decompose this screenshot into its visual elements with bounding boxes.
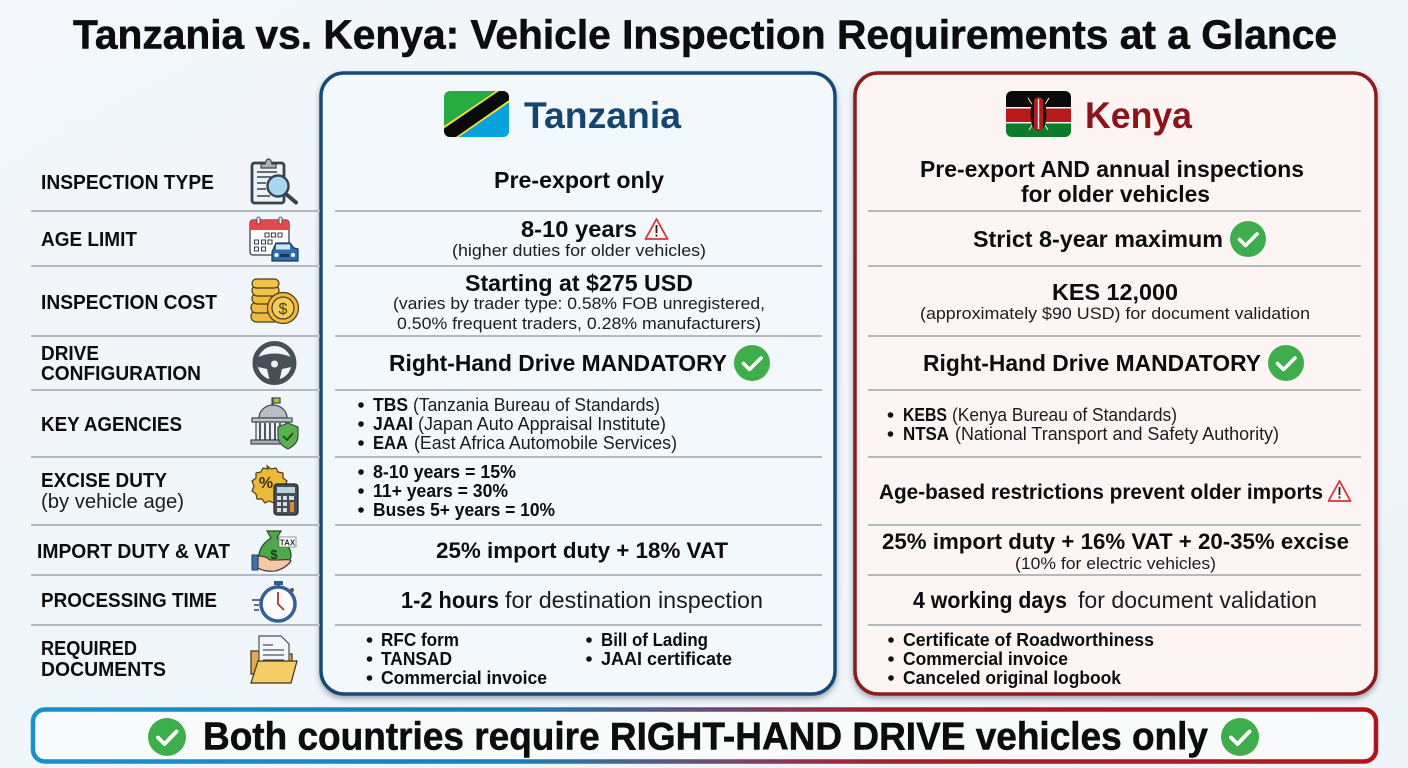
icon: check bbox=[734, 345, 770, 381]
Kenya key agencies: KEBS bbox=[903, 405, 947, 425]
icon: check bbox=[1268, 345, 1304, 381]
label: drive configuration: DRIVE bbox=[41, 343, 99, 365]
Kenya excise duty: Age-based restrictions prevent older imports bbox=[879, 481, 1323, 504]
Tanzania key agencies bbox=[358, 395, 677, 453]
icon: money bag with tax tag: $ bbox=[270, 547, 278, 562]
Kenya import duty bbox=[882, 529, 1349, 573]
Tanzania required documents: Commercial invoice bbox=[381, 668, 547, 688]
Kenya inspection cost: (approximately $90 USD) for document validation bbox=[920, 304, 1310, 323]
label: drive configuration bbox=[41, 343, 201, 385]
Tanzania import duty: 25% import duty + 18% VAT bbox=[436, 538, 729, 563]
icon: warning bbox=[646, 219, 668, 239]
Kenya inspection type: for older vehicles bbox=[1021, 181, 1210, 207]
icon: check right bbox=[1221, 718, 1259, 756]
label: required documents: REQUIRED bbox=[41, 638, 137, 660]
Tanzania inspection cost: Starting at $275 USD bbox=[465, 270, 693, 296]
Tanzania required documents: TANSAD bbox=[381, 649, 452, 669]
heading: Kenya: Kenya bbox=[1085, 95, 1192, 136]
Kenya required documents bbox=[888, 630, 1154, 688]
Kenya key agencies: (National Transport and Safety Authority) bbox=[955, 424, 1279, 444]
Kenya key agencies bbox=[888, 405, 1279, 444]
icon: money bag with tax tag: TAX bbox=[280, 538, 296, 548]
icon: folder with document bbox=[251, 636, 297, 683]
Tanzania drive configuration: Right-Hand Drive MANDATORY bbox=[389, 350, 727, 376]
icon: calendar and car bbox=[250, 217, 298, 261]
Kenya drive configuration bbox=[923, 345, 1304, 381]
label: inspection type: INSPECTION TYPE bbox=[41, 172, 214, 194]
panel: Kenya bbox=[855, 73, 1376, 694]
Kenya required documents: Commercial invoice bbox=[903, 649, 1068, 669]
Tanzania excise duty: Buses 5+ years = 10% bbox=[373, 500, 555, 520]
label: required documents: DOCUMENTS bbox=[41, 659, 166, 681]
icon: coins: $ bbox=[279, 301, 288, 318]
Kenya inspection type bbox=[920, 156, 1304, 207]
Kenya key agencies: NTSA bbox=[903, 424, 949, 444]
Tanzania key agencies: TBS bbox=[373, 395, 408, 415]
Tanzania key agencies: (Tanzania Bureau of Standards) bbox=[413, 395, 660, 415]
Kenya inspection cost: KES 12,000 bbox=[1052, 279, 1178, 305]
Kenya processing time: 4 working days bbox=[913, 587, 1067, 613]
icon: Kenya flag bbox=[1006, 91, 1071, 138]
Tanzania key agencies: (East Africa Automobile Services) bbox=[414, 433, 677, 453]
Kenya import duty: (10% for electric vehicles) bbox=[1015, 554, 1216, 573]
Tanzania required documents bbox=[367, 630, 732, 688]
icon: government building and shield bbox=[251, 398, 298, 449]
Kenya processing time bbox=[913, 587, 1317, 613]
row labels column bbox=[31, 159, 320, 683]
Tanzania inspection type: Pre-export only bbox=[494, 167, 664, 193]
Kenya age limit bbox=[973, 221, 1266, 257]
Tanzania inspection cost: 0.50% frequent traders, 0.28% manufacturers) bbox=[397, 314, 761, 333]
icon: money bag with tax tag bbox=[252, 531, 296, 571]
label: excise duty bbox=[41, 470, 184, 513]
Tanzania key agencies: JAAI bbox=[373, 414, 413, 434]
banner text: Both countries require RIGHT-HAND DRIVE vehicles only bbox=[203, 716, 1208, 758]
Tanzania age limit: (higher duties for older vehicles) bbox=[452, 241, 706, 260]
Tanzania excise duty: 11+ years = 30% bbox=[373, 481, 508, 501]
heading: Tanzania: Tanzania bbox=[524, 95, 681, 136]
Kenya key agencies: (Kenya Bureau of Standards) bbox=[952, 405, 1177, 425]
label: excise duty: EXCISE DUTY bbox=[41, 470, 168, 492]
label: age limit: AGE LIMIT bbox=[41, 229, 137, 251]
label: inspection cost: INSPECTION COST bbox=[41, 292, 217, 314]
Tanzania excise duty bbox=[358, 462, 555, 520]
Kenya age limit: Strict 8-year maximum bbox=[973, 226, 1223, 252]
Tanzania required documents: JAAI certificate bbox=[601, 649, 732, 669]
label: import duty and VAT: IMPORT DUTY & VAT bbox=[37, 541, 230, 563]
Tanzania processing time: for destination inspection bbox=[505, 587, 763, 613]
Tanzania required documents: Bill of Lading bbox=[601, 630, 708, 650]
icon: clipboard and magnifier bbox=[252, 159, 296, 203]
icon: percent badge and calculator: % bbox=[259, 475, 273, 492]
Tanzania drive configuration bbox=[389, 345, 770, 381]
Kenya import duty: 25% import duty + 16% VAT + 20-35% excise bbox=[882, 529, 1349, 554]
Kenya drive configuration: Right-Hand Drive MANDATORY bbox=[923, 350, 1261, 376]
label: key agencies: KEY AGENCIES bbox=[41, 414, 182, 436]
Tanzania key agencies: EAA bbox=[373, 433, 408, 453]
icon: check bbox=[1230, 221, 1266, 257]
title: Tanzania vs. Kenya: Vehicle Inspection Requirements at a Glance bbox=[73, 12, 1337, 58]
Tanzania required documents: RFC form bbox=[381, 630, 459, 650]
Kenya inspection cost bbox=[920, 279, 1310, 323]
label: drive configuration: CONFIGURATION bbox=[41, 363, 201, 385]
Tanzania inspection cost: (varies by trader type: 0.58% FOB unregistered, bbox=[393, 294, 765, 313]
label: processing time: PROCESSING TIME bbox=[41, 590, 217, 612]
Tanzania age limit: 8-10 years bbox=[521, 216, 637, 242]
icon: warning bbox=[1328, 481, 1350, 501]
Tanzania inspection cost bbox=[393, 270, 765, 333]
banner: both countries bbox=[33, 710, 1376, 762]
icon: percent badge and calculator bbox=[252, 466, 298, 515]
Tanzania age limit bbox=[452, 216, 706, 260]
icon: stopwatch bbox=[252, 581, 295, 621]
icon: Tanzania flag bbox=[444, 91, 509, 137]
label: required documents bbox=[41, 638, 166, 681]
panel: Tanzania bbox=[321, 73, 835, 694]
Kenya required documents: Certificate of Roadworthiness bbox=[903, 630, 1154, 650]
Kenya processing time: for document validation bbox=[1078, 587, 1317, 613]
Tanzania processing time: 1-2 hours bbox=[401, 587, 499, 613]
icon: steering wheel bbox=[255, 344, 294, 382]
Tanzania key agencies: (Japan Auto Appraisal Institute) bbox=[418, 414, 666, 434]
Kenya inspection type: Pre-export AND annual inspections bbox=[920, 156, 1304, 182]
icon: check left bbox=[148, 718, 186, 756]
label: excise duty: (by vehicle age) bbox=[41, 491, 184, 513]
icon: coins bbox=[251, 279, 298, 324]
Kenya required documents: Canceled original logbook bbox=[903, 668, 1122, 688]
Tanzania excise duty: 8-10 years = 15% bbox=[373, 462, 516, 482]
